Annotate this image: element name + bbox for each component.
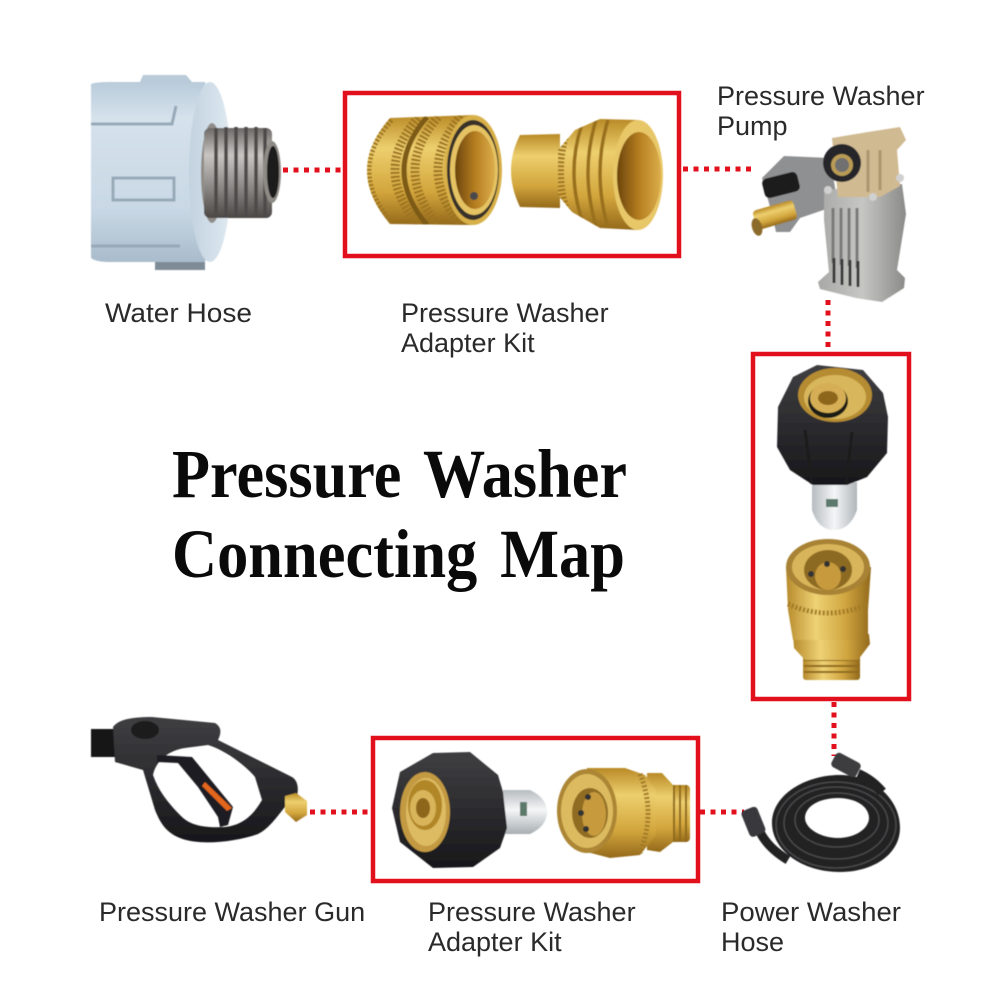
label: power washer hose second line: Hose xyxy=(721,927,784,957)
panel: bottom adapter kit xyxy=(373,738,698,881)
label: pressure washer gun: Pressure Washer Gun xyxy=(99,897,365,927)
icon: brass quick connect with thread xyxy=(786,539,871,680)
connector: kit to pump xyxy=(683,166,752,172)
connector: pump to right kit xyxy=(826,300,830,351)
connector: hose to kit xyxy=(283,168,341,172)
icon: water hose fitting xyxy=(91,75,281,270)
label: bottom adapter kit: Adapter Kit xyxy=(428,927,562,957)
icon: male garden hose adapter xyxy=(511,119,663,230)
label: water hose: Water Hose xyxy=(105,298,252,328)
label: top adapter kit: Adapter Kit xyxy=(401,328,535,358)
icon: pressure washer gun xyxy=(91,717,307,842)
panel: top adapter kit xyxy=(345,93,679,256)
label: power washer hose: Power Washer xyxy=(721,897,901,927)
icon: pressure washer pump xyxy=(750,127,906,302)
label: pressure washer pump: Pressure Washer xyxy=(717,81,925,111)
label: top adapter kit: Pressure Washer xyxy=(401,298,609,328)
label: pressure washer pump: Pump xyxy=(717,111,788,141)
icon: black twist coupler with plug xyxy=(392,752,547,868)
connector: right kit to hose xyxy=(832,702,836,756)
connector: kit to hose xyxy=(700,810,744,814)
icon: brass quick connect with thread xyxy=(557,768,690,858)
connector: gun to kit xyxy=(310,810,370,814)
title: Pressure Washer xyxy=(172,436,627,512)
icon: black twist coupler with plug xyxy=(777,365,888,530)
icon: quick connect socket xyxy=(367,115,502,225)
title: Connecting Map xyxy=(172,516,625,592)
icon: coiled power washer hose xyxy=(740,751,900,872)
label: bottom adapter kit: Pressure Washer xyxy=(428,897,636,927)
title xyxy=(172,436,627,592)
panel: right adapter kit xyxy=(753,354,909,699)
